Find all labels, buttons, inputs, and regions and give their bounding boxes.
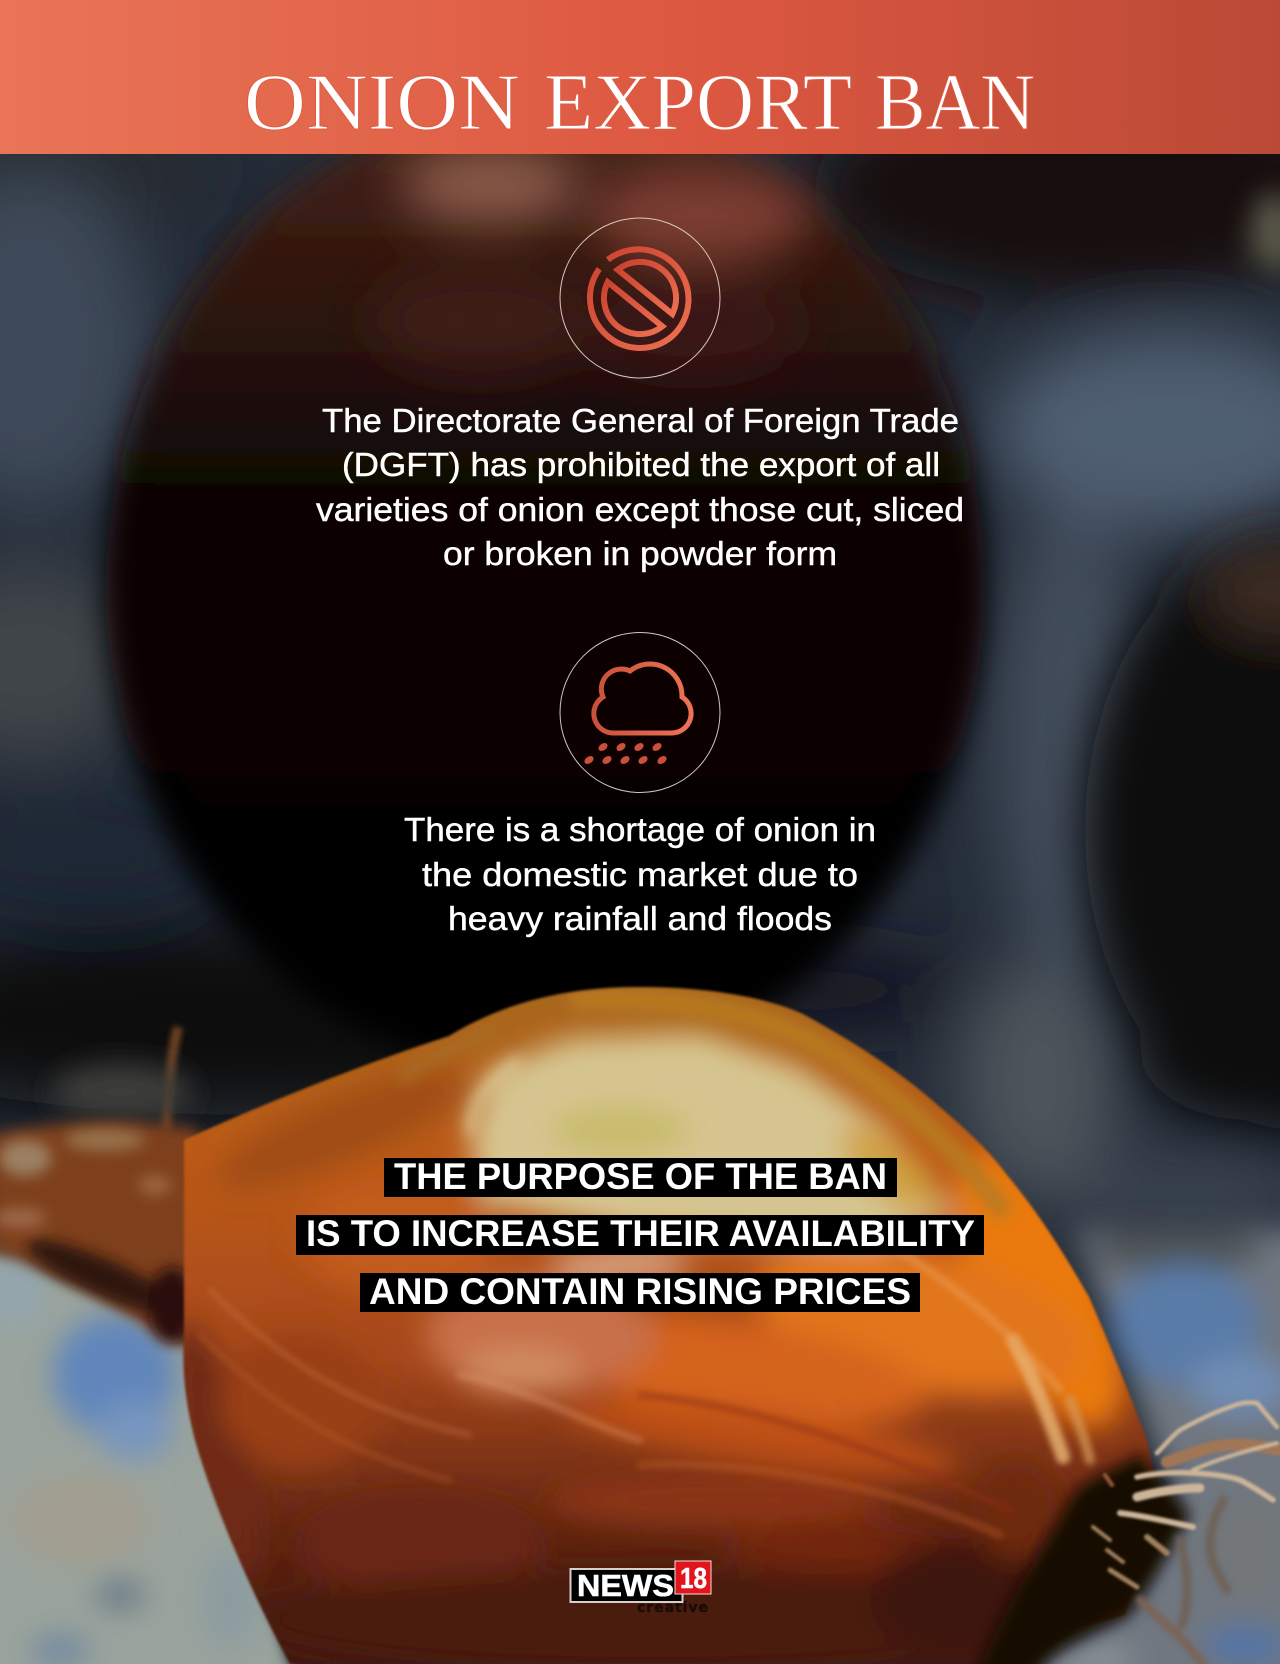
text block: DGFT prohibition: or broken in powder form xyxy=(443,535,837,572)
icon: rain cloud xyxy=(560,632,720,792)
stem spike xyxy=(166,1027,178,1130)
logo: News18 creative: NEWS xyxy=(577,1568,674,1603)
foreground onion xyxy=(151,987,1158,1664)
title: EXPORT xyxy=(544,59,852,147)
text block: DGFT prohibition xyxy=(316,402,964,572)
text block: DGFT prohibition: (DGFT) has prohibited the export of all xyxy=(342,446,940,483)
main dark onion xyxy=(106,110,985,1070)
text block: shortage of onion: There is a shortage of onion in xyxy=(404,811,876,848)
icon: prohibited sign xyxy=(560,218,720,378)
text block: DGFT prohibition: The Directorate General of Foreign Trade xyxy=(322,402,959,439)
haze behind stem xyxy=(52,1064,192,1120)
logo: News18 creative xyxy=(570,1561,711,1616)
text block: shortage of onion xyxy=(404,811,876,937)
logo: News18 creative: 18 xyxy=(680,1563,707,1595)
header banner xyxy=(0,0,1280,154)
top-right pale highlight xyxy=(1251,192,1280,272)
bottom-right blue cloth xyxy=(1036,1215,1280,1664)
callout: purpose of the ban: AND CONTAIN RISING PRICES xyxy=(369,1271,911,1312)
text block: shortage of onion: the domestic market due to xyxy=(422,856,858,893)
right dark onion xyxy=(1085,530,1280,1130)
bottom-left blue cloth xyxy=(0,1240,300,1664)
logo: News18 creative: creative xyxy=(637,1600,708,1616)
callout: purpose of the ban: THE PURPOSE OF THE BAN xyxy=(394,1156,887,1197)
onion root xyxy=(975,1402,1280,1664)
title: ONION xyxy=(244,59,520,147)
title: BAN xyxy=(875,59,1035,147)
dark onion top highlight xyxy=(370,147,810,373)
text block: shortage of onion: heavy rainfall and floods xyxy=(448,900,832,937)
onion stem xyxy=(0,1122,200,1350)
callout: purpose of the ban xyxy=(296,1156,984,1312)
text block: DGFT prohibition: varieties of onion except those cut, sliced xyxy=(316,491,964,528)
callout: purpose of the ban: IS TO INCREASE THEIR AVAILABILITY xyxy=(306,1213,975,1254)
